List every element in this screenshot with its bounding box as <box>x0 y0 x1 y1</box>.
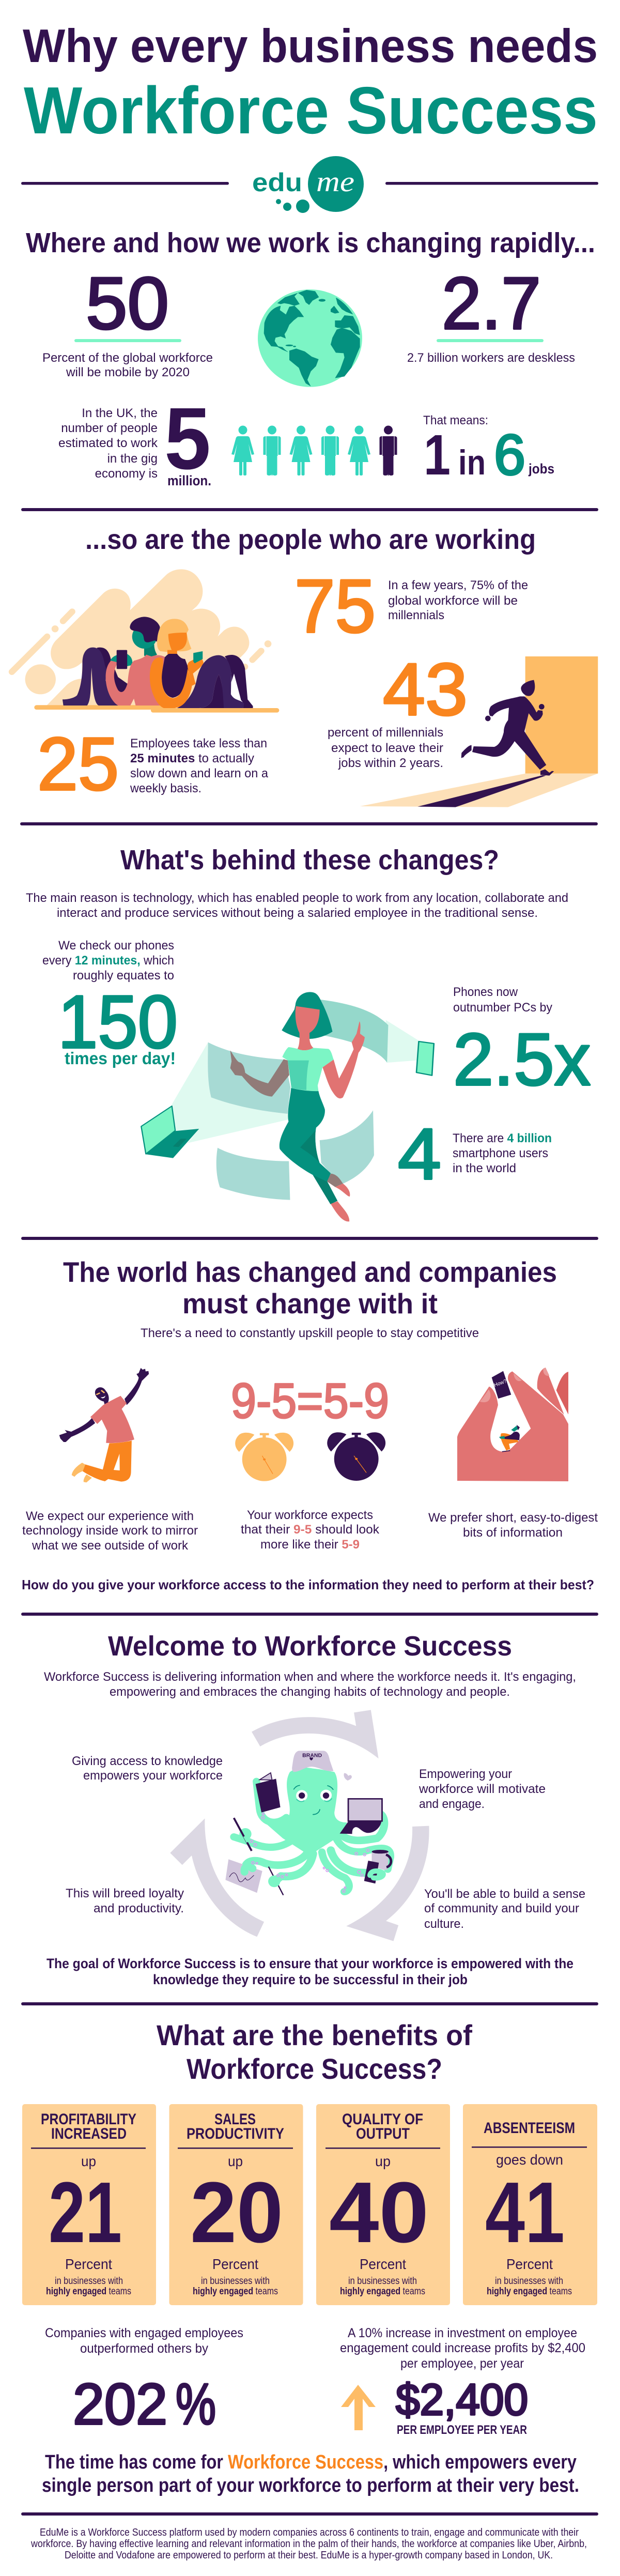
icon: up arrow <box>341 2385 376 2430</box>
text: community: culture. <box>424 1917 464 1931</box>
text: expect our experience: We expect our experience with <box>26 1509 194 1523</box>
edume logo: edu <box>252 168 302 197</box>
stat: 202 percent: Companies with engaged employees <box>45 2326 243 2340</box>
stat: 1 in 6 jobs <box>423 413 554 487</box>
text: giving access: Giving access to knowledge <box>72 1754 223 1768</box>
heading: world has changed: must change with it <box>182 1287 438 1320</box>
icon: octopus <box>225 1751 391 1895</box>
stat: 75 percent millennials: global workforce will be <box>388 594 518 608</box>
edume logo: me <box>316 166 354 198</box>
stat: $2,400 per employee: A 10% increase in investment on employee <box>348 2326 577 2340</box>
stat: 1 in 6 jobs: 6 <box>494 423 525 487</box>
illustration: hand pinching tiny person <box>457 1368 568 1481</box>
card: sales productivity: SALES <box>214 2111 256 2128</box>
card: quality of output <box>316 2104 450 2305</box>
card: quality of output: up <box>375 2153 391 2169</box>
stat: 150 times per day: times per day! <box>65 1049 176 1068</box>
stat: 43 percent leave: percent of millennials <box>328 726 443 740</box>
text: goal statement: knowledge they require to be successful in their job <box>153 1972 468 1987</box>
text: short bits of information: bits of information <box>463 1526 563 1540</box>
text: expect our experience: technology inside work to mirror <box>22 1524 198 1538</box>
card: sales productivity <box>169 2104 303 2305</box>
icon: octopus: BRAND <box>302 1753 322 1758</box>
intro text: The main reason is technology, which has enabled people to work from any location, collaborate and <box>26 891 568 905</box>
diagram: cycle arrows and octopus <box>170 1710 429 1941</box>
stat: 75 percent millennials: In a few years, 75% of the <box>388 578 528 592</box>
text: loyalty: and productivity. <box>94 1902 184 1915</box>
text: empowering <box>419 1767 546 1811</box>
heading: welcome: Welcome to Workforce Success <box>108 1631 512 1662</box>
panel: the people who are working <box>12 524 598 807</box>
stat: 25 minutes: 25 <box>37 722 119 806</box>
icon: two alarm clocks <box>235 1432 385 1481</box>
card: quality of output: 40 <box>329 2165 429 2261</box>
stat: $2,400 per employee: PER EMPLOYEE PER YEAR <box>397 2423 527 2437</box>
panel: the world has changed <box>22 1256 598 1592</box>
stat: 75 percent millennials: 75 <box>295 564 376 648</box>
stat: 43 percent leave: 43 <box>383 649 468 731</box>
text: 9-5 look like 5-9: that their 9-5 should look <box>241 1523 380 1537</box>
card: sales productivity: up <box>228 2153 243 2169</box>
text: goal statement: The goal of Workforce Success is to ensure that your workforce is empowered with the <box>47 1956 574 1971</box>
text: 9-5 look like 5-9: more like their 5-9 <box>260 1538 360 1552</box>
card: sales productivity: 20 <box>190 2165 283 2261</box>
stat: $2,400 per employee: engagement could increase profits by $2,400 <box>340 2341 585 2355</box>
card: absenteeism: highly engaged teams <box>487 2286 572 2297</box>
stat: 75 percent millennials: millennials <box>388 608 444 622</box>
stat: $2,400 per employee <box>340 2326 585 2437</box>
card: absenteeism: Percent <box>506 2256 553 2272</box>
card: profitability: 21 <box>49 2165 122 2261</box>
stat: 150 times per day: We check our phones <box>58 939 174 953</box>
card: profitability: highly engaged teams <box>46 2286 131 2297</box>
stat: 25 minutes <box>37 722 269 806</box>
card: quality of output: Percent <box>360 2256 406 2272</box>
text: short bits of information <box>428 1511 598 1540</box>
stat: 43 percent leave: expect to leave their <box>331 741 443 755</box>
stat: 5 million gig economy: In the UK, the <box>82 406 158 420</box>
stat: phones outnumber PCs 2.5x: outnumber PCs by <box>453 1001 552 1015</box>
card: sales productivity: Percent <box>212 2256 258 2272</box>
stat: 5 million gig economy: estimated to work <box>58 436 158 450</box>
panel: where and how we work <box>26 227 595 488</box>
illustration: runner leaving through door <box>360 656 598 807</box>
card: quality of output: in businesses with <box>348 2276 417 2287</box>
stat: 5 million gig economy: economy is <box>95 467 158 481</box>
stat: 50 percent mobile: 50 <box>86 263 169 345</box>
stat: 4 billion smartphone users <box>398 1113 552 1194</box>
card: quality of output: OUTPUT <box>356 2125 410 2142</box>
text: loyalty: This will breed loyalty <box>66 1887 184 1900</box>
stat: 43 percent leave: jobs within 2 years. <box>338 756 443 770</box>
footer text: Deloitte and Vodafone are empowered to perform at their best. EduMe is a hyper-growth company based in London, UK. <box>65 2550 553 2561</box>
card: absenteeism: 41 <box>485 2165 565 2261</box>
stat: 1 in 6 jobs: in <box>458 443 486 482</box>
text: community: of community and build your <box>424 1902 579 1915</box>
heading: world has changed: The world has changed and companies <box>63 1256 557 1288</box>
stat: 150 times per day: 150 <box>58 980 178 1064</box>
stat: 50 percent mobile <box>42 263 213 379</box>
stat: 202 percent: outperformed others by <box>80 2341 208 2356</box>
icon: globe <box>258 289 362 387</box>
intro text: Workforce Success is delivering information when and where the workforce needs it. It's engaging, <box>44 1670 576 1684</box>
footer text <box>30 2527 587 2561</box>
equation: 9-5 = 5-9: 9-5=5-9 <box>231 1373 389 1429</box>
stat: 4 billion smartphone users: 4 <box>398 1113 441 1194</box>
stat: 50 percent mobile: Percent of the global workforce <box>42 351 213 365</box>
text: loyalty <box>66 1887 184 1915</box>
stat: 43 percent leave <box>328 649 468 770</box>
closing statement: The time has come for Workforce Success, which empowers every <box>45 2451 577 2473</box>
heading: world has changed <box>63 1256 557 1320</box>
heading: benefits: Workforce Success? <box>187 2052 442 2085</box>
stat: 202 percent: % <box>176 2372 216 2436</box>
text: expect our experience: what we see outside of work <box>32 1539 189 1553</box>
panel: what's behind these changes <box>26 845 591 1221</box>
illustration: jumping man <box>59 1368 149 1482</box>
stat: 150 times per day <box>42 939 178 1068</box>
stat: 202 percent: 202 <box>73 2372 167 2436</box>
stat: 5 million gig economy <box>58 390 211 488</box>
illustration: couple on phones <box>12 569 279 713</box>
stat: 5 million gig economy: million. <box>167 473 211 488</box>
stat: 25 minutes: 25 minutes to actually <box>130 752 254 765</box>
stat: 75 percent millennials <box>295 564 528 648</box>
card: profitability <box>22 2104 156 2305</box>
intro text: empowering and embraces the changing habits of technology and people. <box>110 1685 510 1699</box>
stat: 2.7 billion deskless: 2.7 <box>442 263 541 345</box>
card: absenteeism: ABSENTEEISM <box>484 2120 575 2137</box>
stat: 5 million gig economy: number of people <box>61 421 158 435</box>
text: short bits of information: We prefer short, easy-to-digest <box>428 1511 598 1525</box>
stat: 150 times per day: roughly equates to <box>73 969 174 983</box>
stat: 2.7 billion deskless <box>407 263 575 365</box>
text: 9-5 look like 5-9 <box>241 1508 380 1552</box>
card: absenteeism <box>463 2104 597 2305</box>
subheading: upskill: There's a need to constantly upskill people to stay competitive <box>141 1326 479 1340</box>
text: giving access: empowers your workforce <box>83 1769 223 1783</box>
text: giving access <box>72 1754 223 1783</box>
stat: 4 billion smartphone users: There are 4 billion <box>453 1131 552 1145</box>
card: profitability: Percent <box>65 2256 112 2272</box>
title: Why every business needs <box>23 20 598 72</box>
stat: phones outnumber PCs 2.5x: 2.5x <box>453 1019 591 1101</box>
illustration: hand pinching tiny person: How? <box>493 1378 508 1388</box>
stat: $2,400 per employee: $2,400 <box>396 2375 528 2425</box>
panel: welcome to workforce success <box>44 1631 585 1987</box>
text: community: You'll be able to build a sense <box>424 1887 585 1901</box>
card: profitability: up <box>81 2153 96 2169</box>
stat: 150 times per day: every 12 minutes, which <box>42 954 174 968</box>
card: quality of output: highly engaged teams <box>340 2286 425 2297</box>
stat: 2.7 billion deskless: 2.7 billion workers are deskless <box>407 351 575 365</box>
icon: row of six people <box>231 426 397 476</box>
heading: benefits <box>157 2019 472 2085</box>
panel: benefits <box>22 2019 597 2496</box>
intro text <box>44 1670 576 1699</box>
title <box>23 20 598 148</box>
intro text: interact and produce services without being a salaried employee in the traditional sense. <box>57 906 538 920</box>
stat: 5 million gig economy: 5 <box>164 390 211 488</box>
closing statement <box>42 2451 579 2496</box>
text: empowering: workforce will motivate <box>419 1782 546 1796</box>
card: absenteeism: goes down <box>496 2152 563 2168</box>
card: sales productivity: in businesses with <box>201 2276 270 2287</box>
illustration: woman with floating screens <box>141 992 434 1221</box>
cycle arrows <box>170 1710 429 1941</box>
stat: 50 percent mobile: will be mobile by 2020 <box>66 365 190 379</box>
stat: 25 minutes: weekly basis. <box>130 781 202 795</box>
card: profitability: INCREASED <box>51 2125 127 2142</box>
stat: $2,400 per employee: per employee, per year <box>400 2356 524 2371</box>
card: absenteeism: in businesses with <box>495 2276 563 2287</box>
question: how do you give access: How do you give your workforce access to the information they need to perform at their best? <box>22 1577 594 1592</box>
heading: where and how: Where and how we work is changing rapidly... <box>26 227 595 258</box>
card: quality of output: QUALITY OF <box>342 2111 423 2128</box>
intro text <box>26 891 568 920</box>
stat: 25 minutes: slow down and learn on a <box>130 766 269 780</box>
edume logo <box>21 156 598 213</box>
stat: 4 billion smartphone users: smartphone users <box>453 1146 548 1160</box>
text: community <box>424 1887 585 1931</box>
text: empowering: Empowering your <box>419 1767 512 1781</box>
stat: 4 billion smartphone users: in the world <box>453 1161 516 1175</box>
stat: 1 in 6 jobs: jobs <box>528 461 554 477</box>
stat: phones outnumber PCs 2.5x: Phones now <box>453 985 518 999</box>
stat: 1 in 6 jobs: 1 <box>424 423 451 487</box>
heading: what's behind: What's behind these changes? <box>120 845 499 876</box>
stat: 25 minutes: Employees take less than <box>130 737 267 750</box>
card: sales productivity: PRODUCTIVITY <box>187 2125 284 2142</box>
stat: 5 million gig economy: in the gig <box>107 452 158 466</box>
text: 9-5 look like 5-9: Your workforce expects <box>247 1508 373 1522</box>
text: empowering: and engage. <box>419 1797 485 1811</box>
stat: 1 in 6 jobs: That means: <box>423 413 488 427</box>
text: expect our experience <box>22 1509 198 1553</box>
card: sales productivity: highly engaged teams <box>193 2286 278 2297</box>
card: profitability: PROFITABILITY <box>41 2111 136 2128</box>
card: profitability: in businesses with <box>55 2276 123 2287</box>
heading: so are the people: ...so are the people who are working <box>85 524 536 555</box>
text: goal statement <box>47 1956 574 1987</box>
stat: 202 percent <box>45 2326 243 2436</box>
heading: benefits: What are the benefits of <box>157 2019 472 2051</box>
